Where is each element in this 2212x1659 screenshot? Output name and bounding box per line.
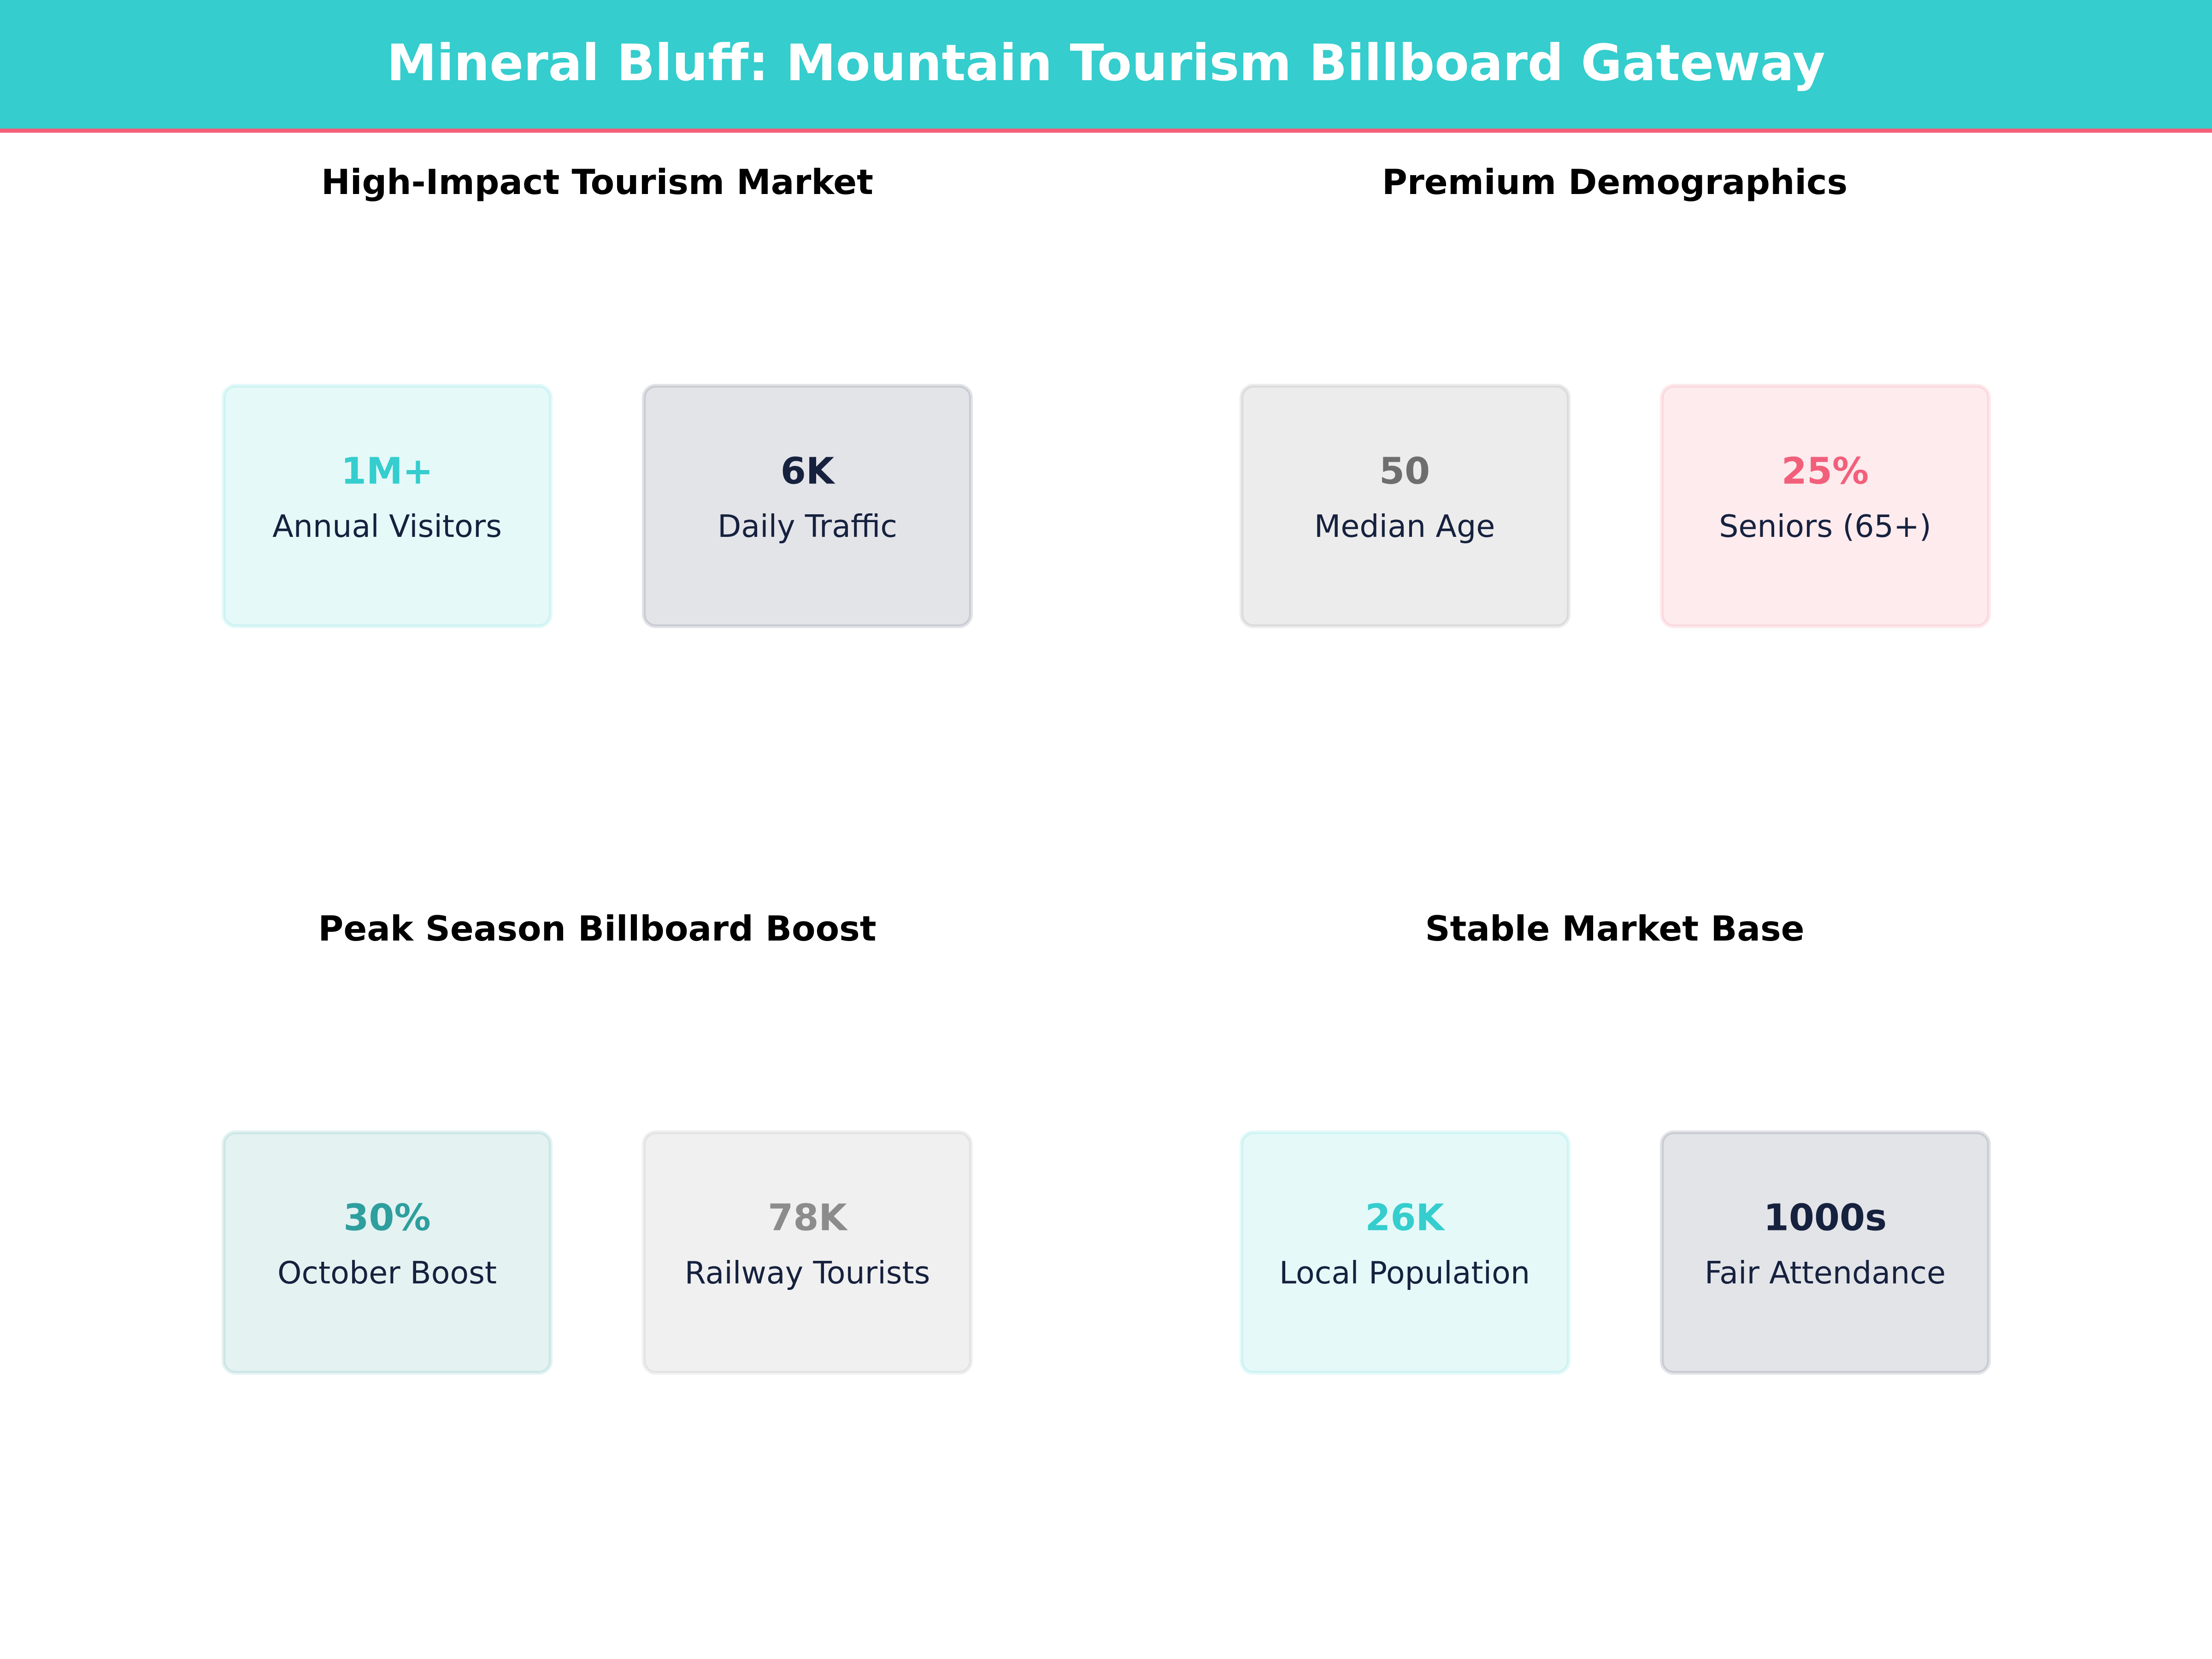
card: Fair Attendance: 1000s: [1764, 1196, 1887, 1239]
panel: Peak Season Billboard Boost: [224, 908, 971, 1373]
card: Daily Traffic: Daily Traffic: [718, 508, 897, 544]
card: Annual Visitors: Annual Visitors: [272, 508, 502, 544]
panel: High-Impact Tourism Market: [224, 162, 971, 626]
header banner: [0, 0, 2212, 133]
card: Daily Traffic: 6K: [781, 450, 835, 492]
card: Daily Traffic: [644, 386, 971, 626]
card: Median Age: 50: [1379, 450, 1430, 492]
card: Railway Tourists: [644, 1132, 971, 1373]
panel: Stable Market Base: [1241, 908, 1989, 1373]
heading: Stable Market Base: Stable Market Base: [1425, 908, 1805, 949]
card: Local Population: 26K: [1365, 1196, 1445, 1239]
card: Seniors (65+): 25%: [1782, 450, 1869, 492]
card: October Boost: 30%: [343, 1196, 431, 1239]
heading: High-Impact Tourism Market: High-Impact Tourism Market: [321, 162, 873, 202]
card: Local Population: [1241, 1132, 1569, 1373]
card: Seniors (65+): Seniors (65+): [1719, 508, 1931, 544]
heading: Peak Season Billboard Boost: Peak Season Billboard Boost: [318, 908, 877, 949]
card: Fair Attendance: Fair Attendance: [1705, 1255, 1946, 1291]
card: Railway Tourists: Railway Tourists: [685, 1255, 930, 1291]
card: Median Age: [1241, 386, 1569, 626]
card: Fair Attendance: [1662, 1132, 1989, 1373]
card: October Boost: October Boost: [277, 1255, 497, 1291]
title: Mineral Bluff: Mountain Tourism Billboard Gateway: [387, 34, 1825, 92]
card: Railway Tourists: 78K: [768, 1196, 848, 1239]
card: Annual Visitors: [224, 386, 551, 626]
heading: Premium Demographics: Premium Demographics: [1382, 162, 1847, 202]
card: October Boost: [224, 1132, 551, 1373]
card: Annual Visitors: 1M+: [341, 450, 433, 492]
card: Median Age: Median Age: [1314, 508, 1495, 544]
card: Local Population: Local Population: [1279, 1255, 1530, 1291]
panel: Premium Demographics: [1241, 162, 1989, 626]
card: Seniors (65+): [1662, 386, 1989, 626]
